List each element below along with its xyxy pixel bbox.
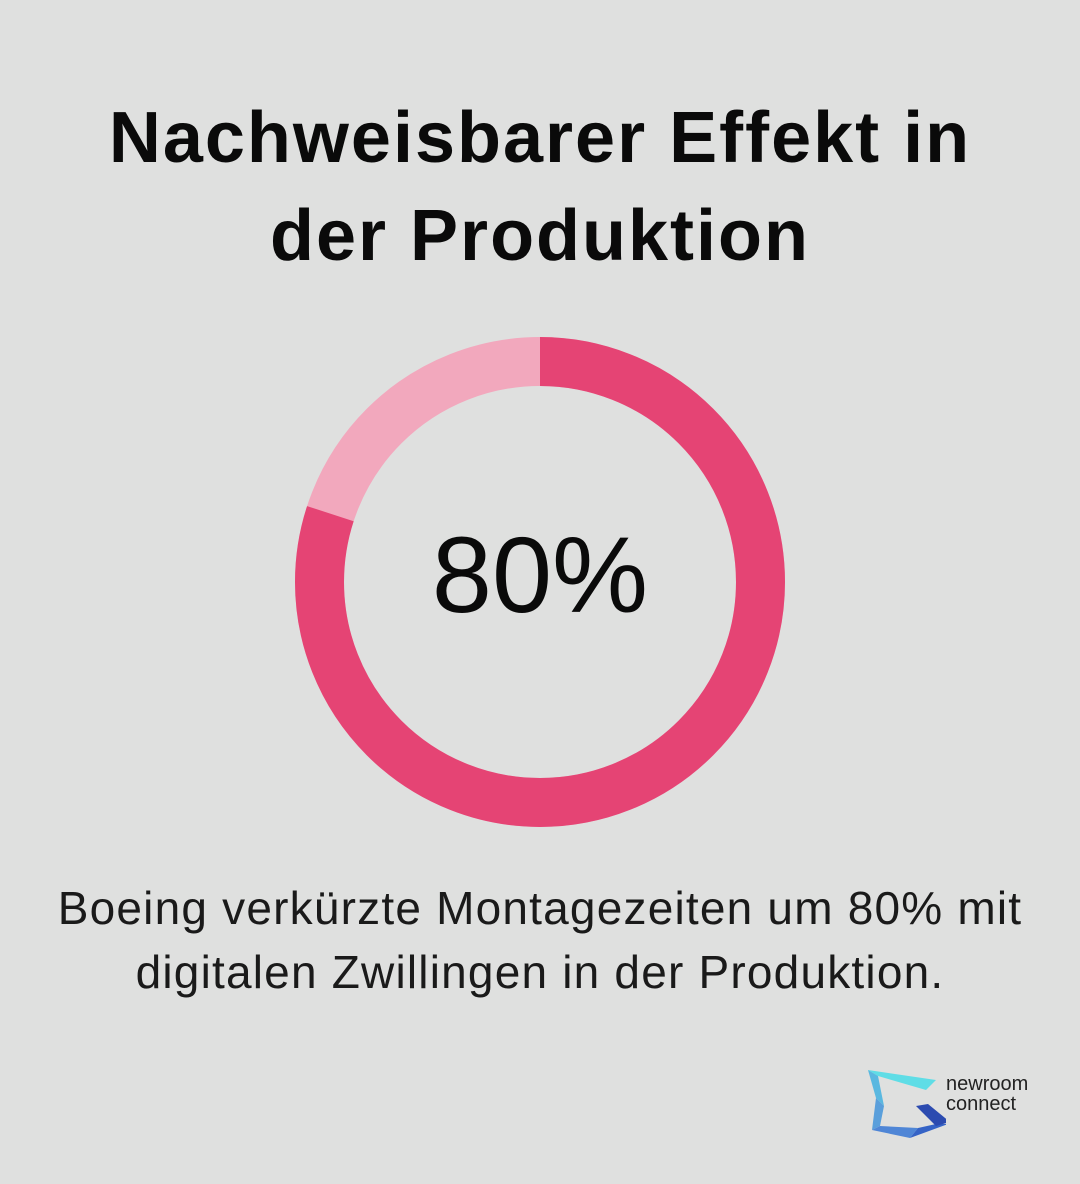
logo [868, 1070, 1028, 1138]
title: der Produktion [270, 196, 810, 276]
logo: newroom [946, 1073, 1028, 1095]
caption [58, 882, 1022, 998]
title: Nachweisbarer Effekt in [109, 98, 971, 178]
caption: Boeing verkürzte Montagezeiten um 80% mit [58, 882, 1022, 934]
title [109, 98, 971, 276]
caption: digitalen Zwillingen in der Produktion. [136, 946, 944, 998]
donut chart: 80% [432, 514, 648, 635]
logo: connect [946, 1093, 1016, 1115]
